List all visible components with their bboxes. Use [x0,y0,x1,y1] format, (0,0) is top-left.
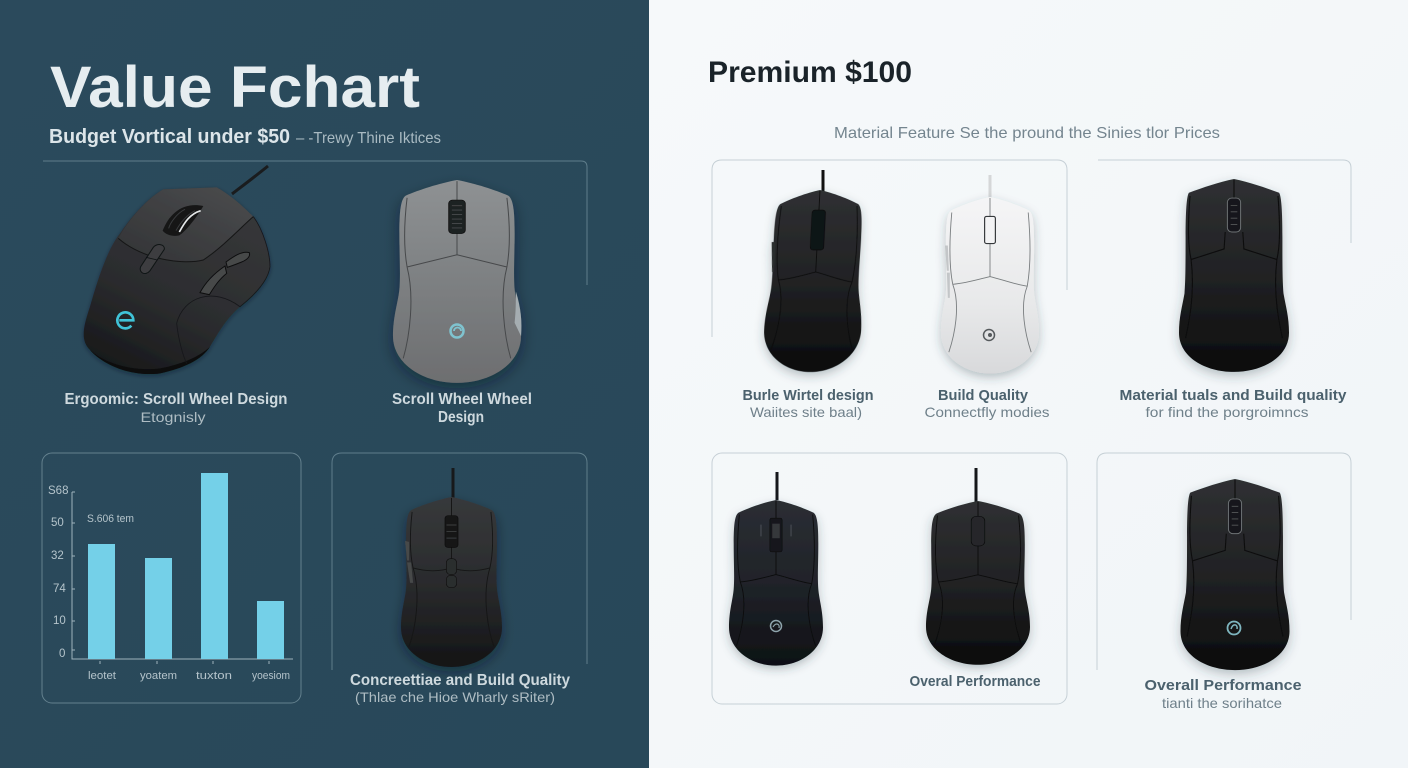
axis labels [48,485,290,682]
icon: black corded mouse [762,170,868,372]
icon: wide black mouse [926,468,1030,665]
text: overall performance inner label: Overal Performance [910,673,1040,690]
text: overall performance label [1144,677,1302,711]
bars [88,473,284,659]
text: scroll wheel label [392,391,532,426]
axis labels: 0 [59,648,65,660]
axis labels: 32 [51,550,64,562]
axis labels: 10 [53,615,66,627]
text: build quality premium label: Connectfly modies [924,404,1050,420]
axis labels: tuxton [196,670,232,682]
axis labels: leotet [88,670,116,682]
text: build quality label: (Thlae che Hioe Wharly sRiter) [355,689,555,705]
text: wheel design label: Burle Wirtel design [742,387,874,404]
panel: budget background [0,0,649,768]
text: material label: for find the porgroimncs [1146,404,1308,420]
panel: premium top-left frame [712,160,1067,337]
subtitle: Budget Vortical under $50 [49,126,290,148]
text: material label: Material tuals and Build quality [1120,387,1347,404]
text: material label [1120,387,1347,420]
panel: bar chart [42,453,301,703]
panel: premium background [649,0,1408,768]
text: wheel design label: Waiites site baal) [750,404,862,420]
icon: gray mouse [393,180,521,383]
icon: dark mouse with side buttons [401,468,502,667]
text: overall performance label: tianti the sorihatce [1162,695,1282,711]
text: ergonomic label [64,391,288,425]
axis labels: S68 [48,485,68,497]
panel: budget top frame [43,161,587,285]
panel: premium bottom-right frame [1097,453,1351,670]
panel: premium bottom-left frame [712,453,1067,704]
subtitle [49,126,441,148]
axis labels: yoesiom [252,670,290,682]
text: build quality label [350,672,570,705]
icon: white mouse [941,175,1039,374]
icon: navy mouse [729,472,823,666]
panel: premium top-right frame [1098,160,1351,243]
text: scroll wheel label: Design [438,409,484,426]
premium subtitle: Material Feature Se the pround the Sinies tlor Prices [834,125,1220,142]
subtitle: – -Trewy Thine Iktices [296,130,441,147]
panel: build quality frame [332,453,587,670]
axis labels: S.606 tem [87,513,134,525]
axis labels: 74 [53,583,66,595]
text: scroll wheel label: Scroll Wheel Wheel [392,391,532,408]
text: wheel design label [742,387,874,420]
text: build quality premium label [924,387,1050,420]
icon: large black mouse [1179,179,1289,372]
text: ergonomic label: Etognisly [140,409,206,425]
text: ergonomic label: Ergoomic: Scroll Wheel Design [64,391,288,408]
axis labels: 50 [51,517,64,529]
text: build quality label: Concreettiae and Build Quality [350,672,570,689]
title: Value Fchart [50,55,420,120]
icon: ergonomic black mouse [84,166,270,374]
axis labels: yoatem [140,670,177,682]
premium heading: Premium $100 [708,56,912,89]
text: build quality premium label: Build Quality [938,387,1029,404]
icon: large black mouse with logo [1180,479,1290,670]
text: overall performance label: Overall Performance [1144,677,1302,694]
